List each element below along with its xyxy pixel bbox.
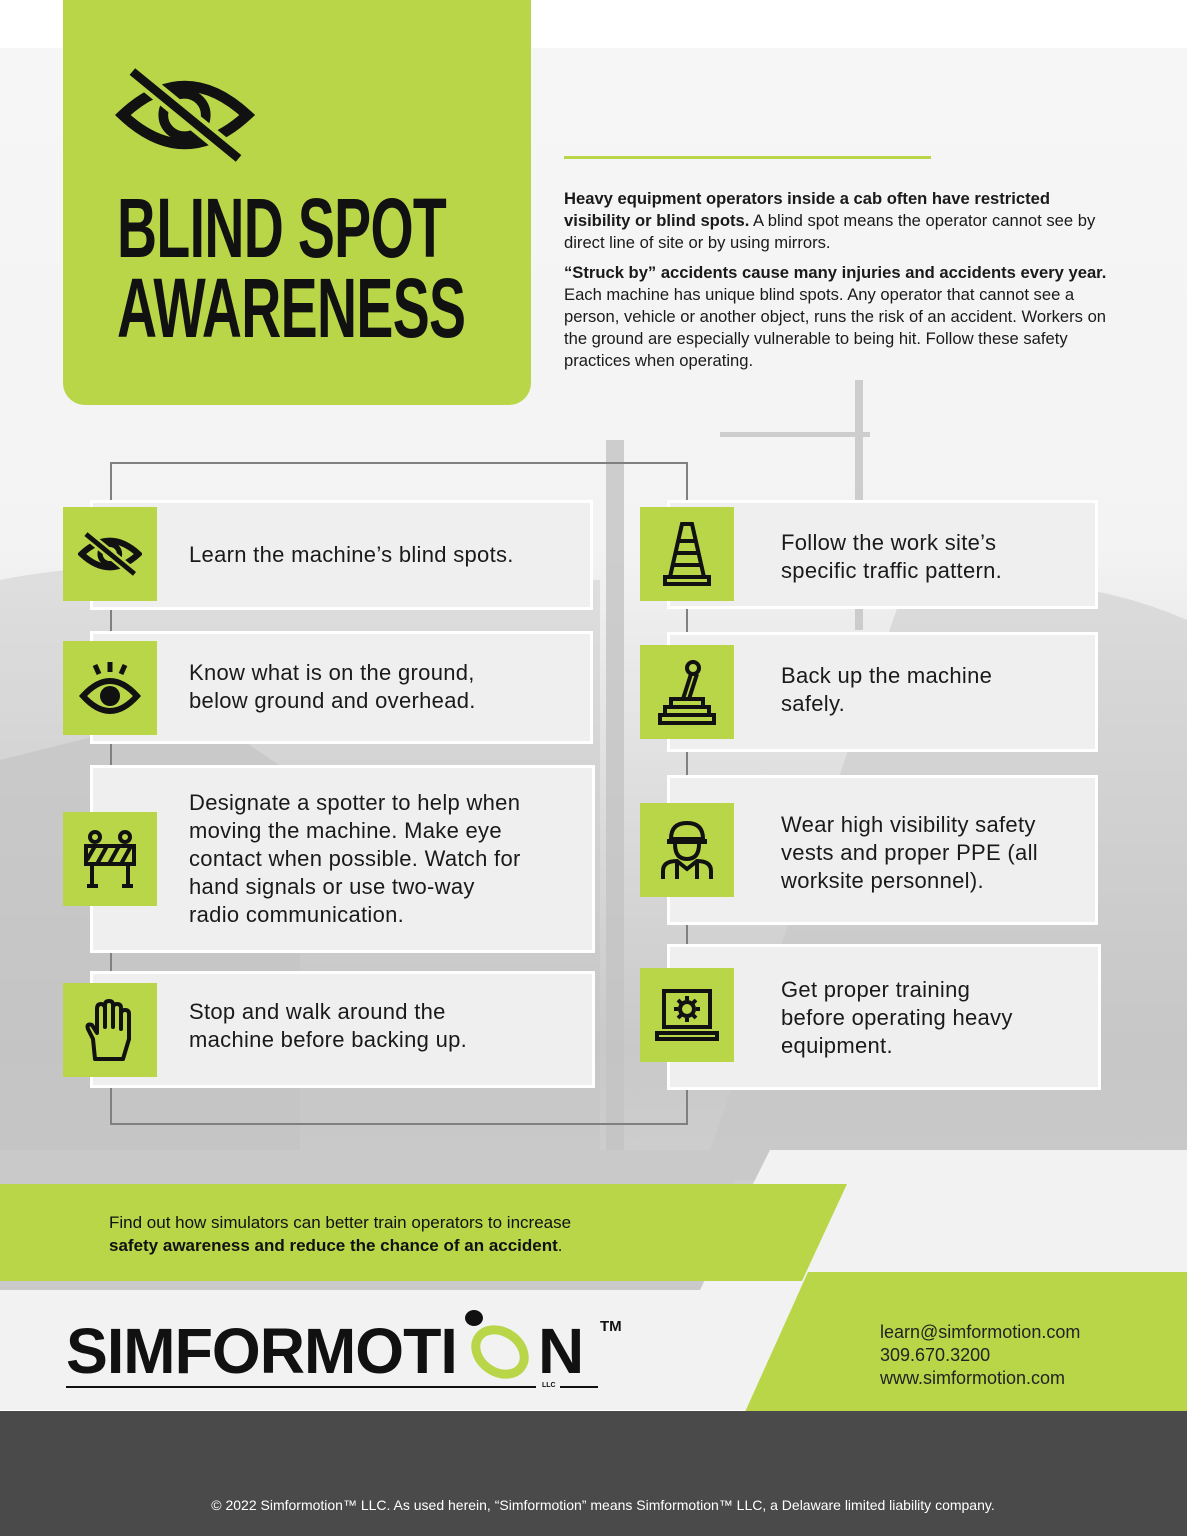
CTA text: safety awareness and reduce the chance of an accident.	[109, 1236, 563, 1255]
CTA text: Find out how simulators can better train operators to increase	[109, 1213, 571, 1232]
contact text: www.simformotion.com	[880, 1368, 1065, 1388]
right card 3	[667, 775, 1098, 925]
CTA band	[0, 1184, 847, 1281]
text r3: worksite personnel).	[781, 868, 984, 893]
text 2: below ground and overhead.	[189, 688, 476, 713]
right card 1	[667, 500, 1098, 609]
CTA text	[109, 1213, 571, 1255]
text r4: equipment.	[781, 1033, 893, 1058]
contact text: 309.670.3200	[880, 1345, 990, 1365]
title: BLIND SPOT	[117, 181, 446, 275]
text r3: Wear high visibility safety	[781, 812, 1036, 837]
text 3: contact when possible. Watch for	[189, 846, 521, 871]
icon: hand	[63, 983, 157, 1077]
logo: LLC	[542, 1382, 556, 1389]
left card 3	[90, 765, 595, 953]
title: AWARENESS	[117, 261, 465, 355]
icon: laptop gear	[640, 968, 734, 1062]
copyright: © 2022 Simformotion™ LLC. As used herein, “Simformotion” means Simformotion™ LLC, a Delaware limited liability company.	[211, 1497, 995, 1513]
logo: SIMFORMOTI	[66, 1315, 457, 1387]
text 4: Stop and walk around the	[189, 999, 446, 1024]
icon: cone	[640, 507, 734, 601]
text r3: vests and proper PPE (all	[781, 840, 1038, 865]
text r4: before operating heavy	[781, 1005, 1013, 1030]
contact text	[880, 1322, 1080, 1388]
intro text	[564, 189, 1106, 370]
left card 4	[90, 971, 595, 1088]
icon: joystick	[640, 645, 734, 739]
text r2	[781, 663, 992, 716]
background silhouettes	[0, 69, 1187, 998]
intro text: Heavy equipment operators inside a cab often have restricted visibility or blind spots. A blind spot means the operator cannot see by direct line of site or by using mirrors.	[564, 189, 1095, 252]
text r2: safely.	[781, 691, 845, 716]
text 3	[189, 790, 521, 927]
text 2	[189, 660, 476, 713]
footer	[0, 1411, 1187, 1536]
bottom shapes	[0, 1150, 1187, 1410]
text r1	[781, 530, 1002, 583]
icon: crossed eye small	[63, 507, 157, 601]
accent line	[564, 156, 931, 159]
text 1: Learn the machine’s blind spots.	[189, 542, 514, 567]
right card 2	[667, 632, 1098, 752]
right card 4	[667, 944, 1101, 1090]
contact text: learn@simformotion.com	[880, 1322, 1080, 1342]
text r2: Back up the machine	[781, 663, 992, 688]
text 2: Know what is on the ground,	[189, 660, 475, 685]
text r4: Get proper training	[781, 977, 970, 1002]
logo: TM	[600, 1318, 622, 1335]
title panel	[63, 0, 531, 405]
bracket frame	[110, 462, 688, 1125]
text 3: hand signals or use two-way	[189, 874, 475, 899]
text r4	[781, 977, 1013, 1058]
text r1: Follow the work site’s	[781, 530, 996, 555]
logo	[66, 1310, 622, 1389]
text 3: radio communication.	[189, 902, 404, 927]
title	[117, 181, 465, 355]
intro text: “Struck by” accidents cause many injuries and accidents every year. Each machine has unique blind spots. Any operator that cannot see a person, vehicle or another object, runs the risk of an accident. Workers on the ground are especially vulnerable to being hit. Follow these safety practices when operating.	[564, 263, 1106, 370]
left card 2	[90, 631, 593, 744]
icon: crossed eye	[115, 68, 255, 162]
contact panel	[746, 1272, 1187, 1411]
text 4	[189, 999, 467, 1052]
text r3	[781, 812, 1038, 893]
icon: eye	[63, 641, 157, 735]
left card 1	[90, 500, 593, 610]
logo: N	[538, 1315, 584, 1387]
text r1: specific traffic pattern.	[781, 558, 1002, 583]
text 4: machine before backing up.	[189, 1027, 467, 1052]
text 3: moving the machine. Make eye	[189, 818, 502, 843]
text 3: Designate a spotter to help when	[189, 790, 520, 815]
icon: barrier	[63, 812, 157, 906]
icon: worker	[640, 803, 734, 897]
